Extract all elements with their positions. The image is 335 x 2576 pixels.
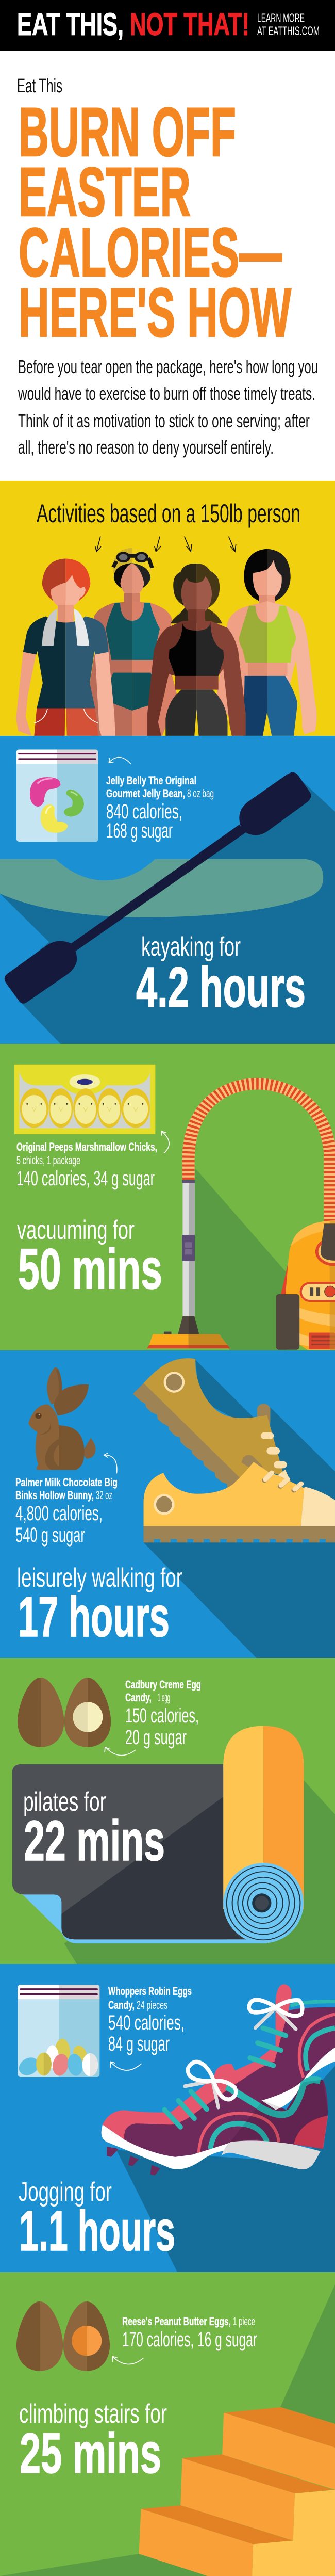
- bunny product text: Palmer Milk Chocolate Big: [15, 1476, 118, 1489]
- climbing duration: 25 mins: [20, 2422, 161, 2485]
- arrow to eggs: [105, 1747, 136, 1756]
- long shadows: [0, 2284, 335, 2576]
- jogging duration: [19, 2177, 175, 2263]
- bunny product text: 4,800 calories,: [15, 1502, 103, 1525]
- panel: vacuuming: [0, 1044, 335, 1350]
- walking duration: 17 hours: [18, 1585, 170, 1649]
- vacuum hose: [189, 1084, 330, 1221]
- panel: jogging: [0, 1964, 335, 2272]
- whoppers product text: 540 calories,: [108, 2011, 185, 2034]
- stairs illustration: [0, 2284, 335, 2576]
- reese's product text: [122, 2315, 257, 2351]
- walking duration: [17, 1563, 182, 1649]
- reese's product text: 1 piece: [233, 2315, 255, 2328]
- creme egg product text: Cadbury Creme Egg: [125, 1678, 201, 1691]
- learn more link: [257, 11, 320, 38]
- creme egg product text: Candy,: [125, 1691, 152, 1704]
- bunny product text: 540 g sugar: [15, 1524, 85, 1547]
- jogging duration: 1.1 hours: [19, 2199, 175, 2263]
- icon: peanut butter eggs: [16, 2301, 110, 2371]
- arrow to bag: [109, 758, 131, 764]
- long shadow: [116, 2066, 335, 2272]
- stairs: [139, 2407, 335, 2576]
- intro paragraph: [18, 356, 318, 458]
- peeps product text: [16, 1140, 157, 1190]
- panel: kayaking: [0, 736, 335, 1044]
- whoppers product text: 24 pieces: [137, 1999, 167, 2011]
- arrow to bunny: [104, 1453, 117, 1473]
- kayaking duration: kayaking for: [141, 932, 241, 962]
- jelly bean product text: [106, 774, 214, 842]
- bottom shoe: [144, 1462, 335, 1542]
- whoppers product text: [108, 1985, 192, 2055]
- title: EASTER: [19, 154, 191, 231]
- yoga mat roll: [223, 1726, 304, 1943]
- jelly bean product text: 168 g sugar: [106, 819, 173, 842]
- arrow to whoppers: [110, 2062, 141, 2070]
- person: swimmer: [89, 548, 177, 736]
- jelly bean product text: 8 oz bag: [187, 787, 214, 800]
- vacuuming duration: 50 mins: [18, 1237, 162, 1301]
- panel: climbing stairs: [0, 2272, 335, 2576]
- person: towel: [16, 559, 115, 736]
- pilates duration: pilates for: [23, 1787, 106, 1817]
- title: [19, 94, 291, 351]
- creme egg product text: 20 g sugar: [125, 1726, 187, 1749]
- icon: creme eggs: [18, 1678, 111, 1747]
- walking illustration: [28, 1358, 335, 1658]
- vacuum floor head: [147, 1332, 230, 1348]
- vacuum illustration: [14, 1065, 335, 1350]
- climbing duration: climbing stairs for: [19, 2399, 167, 2429]
- person: black hair: [217, 549, 317, 736]
- walking duration: leisurely walking for: [17, 1563, 182, 1593]
- running shoes: [102, 1984, 335, 2176]
- panel: walking: [0, 1350, 335, 1658]
- climbing duration: [19, 2399, 167, 2485]
- arrows to people: [95, 536, 236, 552]
- jelly bean product text: 840 calories,: [106, 800, 182, 823]
- long shadow: [0, 776, 335, 1044]
- creme egg product text: 150 calories,: [125, 1704, 199, 1727]
- long shadow: [64, 1780, 335, 1964]
- creme egg product text: [125, 1678, 201, 1749]
- person: braids: [147, 564, 246, 736]
- reese's product text: Reese's Peanut Butter Eggs,: [122, 2315, 231, 2328]
- kayak illustration: [0, 750, 335, 1044]
- bunny product text: Binks Hollow Bunny,: [15, 1489, 94, 1502]
- long shadows: [144, 1360, 335, 1658]
- peeps product text: 140 calories, 34 g sugar: [16, 1167, 155, 1190]
- icon: chocolate bunny: [28, 1367, 95, 1470]
- creme egg product text: 1 egg: [158, 1691, 170, 1704]
- vacuum pole: [177, 1180, 200, 1337]
- vacuuming duration: vacuuming for: [17, 1215, 135, 1245]
- kayak hull: [0, 859, 323, 917]
- icon: peeps package: [14, 1065, 155, 1134]
- peeps product text: Original Peeps Marshmallow Chicks,: [16, 1140, 157, 1153]
- whoppers product text: Candy,: [108, 1999, 135, 2011]
- paddle: [5, 772, 311, 1004]
- icon: whoppers bag: [16, 1985, 99, 2079]
- long shadow: [195, 1168, 286, 1350]
- jogging illustration: [16, 1984, 335, 2272]
- logo: not that: NOT THAT!: [130, 7, 249, 42]
- whoppers product text: 84 g sugar: [108, 2033, 170, 2055]
- bunny product text: 32 oz: [96, 1489, 112, 1502]
- kayaking duration: [136, 932, 306, 1019]
- kicker: Eat This: [17, 75, 62, 97]
- whoppers product text: Whoppers Robin Eggs: [108, 1985, 192, 1998]
- pilates duration: 22 mins: [24, 1809, 165, 1873]
- pilates duration: [23, 1787, 165, 1873]
- yoga mat sheet: [12, 1764, 267, 1943]
- people illustration: [16, 536, 317, 736]
- icon: jelly bean bag: [16, 750, 98, 842]
- pilates illustration: [12, 1678, 335, 1964]
- top boot: [133, 1358, 291, 1489]
- panel: activities: [0, 481, 335, 736]
- jogging duration: Jogging for: [19, 2177, 112, 2207]
- vacuuming duration: [17, 1215, 162, 1301]
- vacuum body: [276, 1220, 335, 1350]
- bunny product text: [15, 1476, 118, 1547]
- jelly bean product text: Gourmet Jelly Bean,: [106, 787, 185, 800]
- arrow to peeps: [162, 1131, 169, 1153]
- peeps product text: 5 chicks, 1 package: [16, 1154, 80, 1167]
- jelly bean product text: Jelly Belly The Original: [106, 774, 196, 787]
- header bar: [0, 0, 335, 51]
- panel: pilates: [0, 1658, 335, 1964]
- logo: eat this: EAT THIS,: [17, 7, 124, 42]
- arrow to eggs: [112, 2357, 144, 2364]
